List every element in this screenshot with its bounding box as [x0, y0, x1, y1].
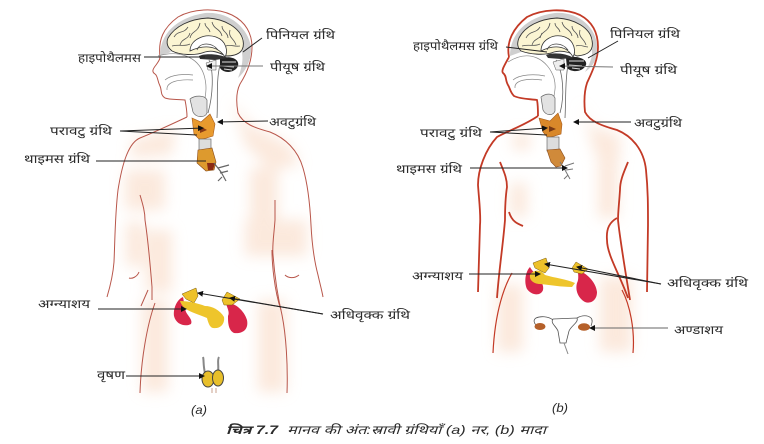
labels: female: थाइमस ग्रंथि [396, 161, 462, 176]
labels: male: अधिवृक्क ग्रंथि [330, 307, 410, 322]
lower body outline: female [493, 273, 633, 353]
testes: male [202, 357, 224, 393]
labels: male: वृषण [97, 368, 125, 382]
skin shading: female [497, 100, 632, 352]
skin shading: male [125, 100, 307, 392]
labels: female: पीयूष ग्रंथि [620, 62, 677, 78]
labels: female: (b) [552, 401, 568, 415]
labels: female: हाइपोथैलमस ग्रंथि [413, 38, 498, 53]
uterus and ovaries: female [534, 316, 592, 354]
body outline: male [107, 10, 323, 393]
labels: male: अवटुग्रंथि [269, 114, 316, 130]
leader lines: female [469, 41, 668, 328]
labels: female: अवटुग्रंथि [634, 115, 682, 131]
figure (a): male body [96, 10, 323, 393]
labels: male: पिनियल ग्रंथि [266, 27, 335, 42]
labels: male [24, 27, 410, 417]
labels: male: थाइमस ग्रंथि [24, 151, 90, 166]
kidneys and adrenals: female [525, 258, 597, 303]
labels: male: परावटु ग्रंथि [50, 123, 112, 139]
labels: male: हाइपोथैलमस [78, 50, 142, 65]
labels: female: अग्न्याशय [412, 269, 464, 283]
labels: female: पिनियल ग्रंथि [610, 26, 680, 41]
labels: male: (a) [191, 403, 207, 417]
labels: male: अग्न्याशय [38, 297, 91, 311]
leader lines: male [96, 38, 323, 376]
pancreas: male [180, 301, 224, 328]
caption [226, 423, 550, 437]
caption: मानव की अंत:स्रावी ग्रंथियाँ (a) नर, (b) मादा [287, 423, 550, 437]
trachea and thymus: male [197, 139, 229, 181]
caption: चित्र 7.7 [226, 423, 280, 437]
figure (b): female body [469, 10, 668, 354]
pancreas: female [530, 271, 575, 287]
kidneys and adrenals: male [174, 288, 247, 333]
brain: female [510, 13, 597, 118]
trachea and thymus: female [547, 137, 574, 179]
brain: male [160, 13, 251, 118]
labels: female: परावटु ग्रंथि [420, 125, 482, 141]
throat and airway: male [158, 54, 207, 117]
labels: female: अधिवृक्क ग्रंथि [667, 275, 748, 290]
thyroid gland: female [539, 113, 562, 138]
labels: female [396, 26, 748, 415]
throat and airway: female [508, 56, 555, 115]
labels: female: अण्डाशय [674, 323, 724, 337]
thyroid gland: male [192, 114, 215, 140]
labels: male: पीयूष ग्रंथि [270, 59, 325, 75]
body outline: female [478, 10, 648, 300]
